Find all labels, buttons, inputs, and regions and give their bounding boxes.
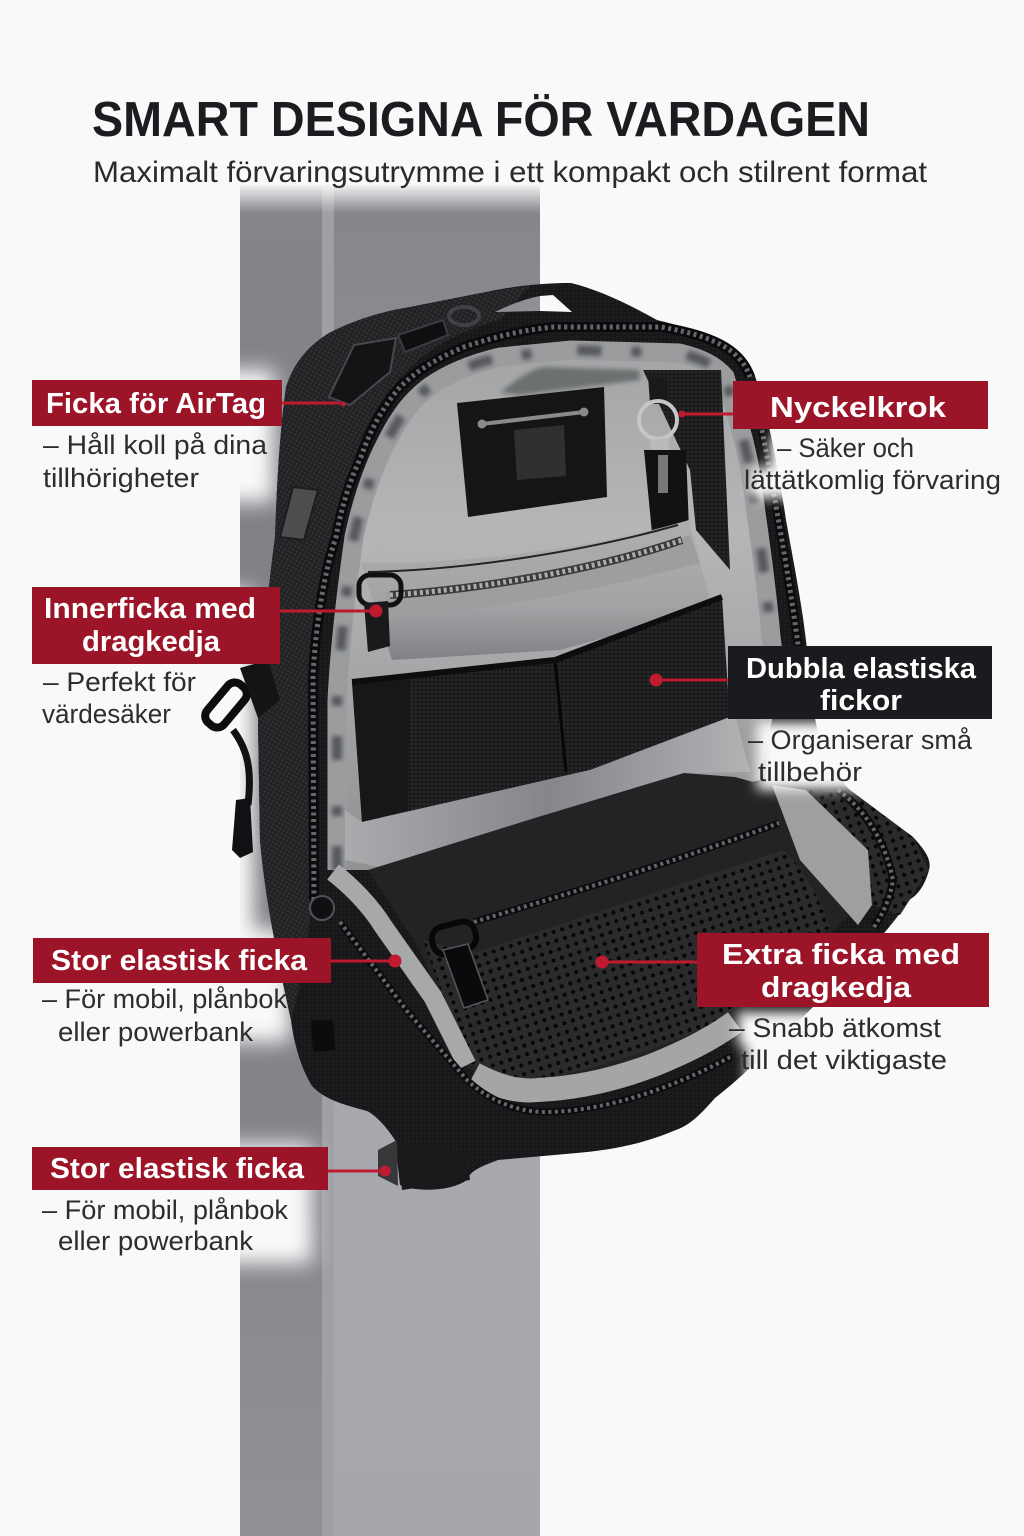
callout: Nyckelkrok <box>733 381 1001 495</box>
callout: Extra ficka med dragkedja: – Snabb ätkomst <box>729 1013 942 1043</box>
callout: Nyckelkrok: – Säker och <box>777 433 914 463</box>
connector lines and dots <box>280 402 734 1176</box>
flap outer zipper <box>340 922 732 1112</box>
callout: Stor elastisk ficka 1 <box>33 938 331 1047</box>
grey pillar <box>238 183 542 1536</box>
callout: Innerficka med dragkedja: Innerficka med <box>44 593 256 625</box>
callout: Dubbla elastiska fickor: tillbehör <box>758 757 862 787</box>
top zipper pulls <box>329 307 479 405</box>
flap zipper <box>474 823 779 922</box>
flap grey trim bottom <box>474 1022 735 1090</box>
white glow behind left labels <box>0 370 312 1263</box>
callout: Stor elastisk ficka 1: – För mobil, plånbok <box>42 984 287 1014</box>
callout: Extra ficka med dragkedja: till det viktigaste <box>741 1045 947 1075</box>
callout: Stor elastisk ficka 2: Stor elastisk ficka <box>50 1153 305 1185</box>
inner zipper pull <box>359 575 401 652</box>
bottom strap loop <box>378 1140 470 1190</box>
callout: Dubbla elastiska fickor <box>728 646 992 787</box>
flap grey trim right <box>772 785 872 925</box>
white glow over right side of bag <box>738 436 1024 1110</box>
flap zipper pull <box>429 919 488 1008</box>
lower flap <box>333 773 929 1112</box>
side strap tab <box>280 487 318 540</box>
callout: Dubbla elastiska fickor: – Organiserar små <box>748 725 973 755</box>
callout: Stor elastisk ficka 1: eller powerbank <box>58 1017 254 1047</box>
interior lining <box>337 350 778 870</box>
title: SMART DESIGNA FÖR VARDAGEN <box>92 93 870 147</box>
dual elastic pockets <box>352 597 730 822</box>
callout: Innerficka med dragkedja: dragkedja <box>82 626 221 658</box>
outer fabric panel <box>258 286 530 1020</box>
callout: Extra ficka med dragkedja: Extra ficka med <box>722 939 960 971</box>
flap dark edge right <box>806 790 929 915</box>
dark mesh behind key hook <box>643 370 730 570</box>
flap grey trim left <box>333 872 467 1065</box>
mesh pocket <box>423 850 830 1083</box>
inner zip pocket <box>361 520 725 660</box>
dark shadow above patch <box>500 367 640 395</box>
backpack illustration <box>202 283 930 1190</box>
callout: Stor elastisk ficka 2: eller powerbank <box>58 1226 254 1256</box>
bag body <box>258 283 930 1190</box>
callout: Ficka för AirTag <box>32 380 282 493</box>
callout: Nyckelkrok: lättätkomlig förvaring <box>744 465 1001 495</box>
patch <box>457 387 607 517</box>
subtitle: Maximalt förvaringsutrymme i ett kompakt och stilrent format <box>93 156 928 189</box>
callout: Innerficka med dragkedja: värdesäker <box>42 699 171 729</box>
key hook <box>639 375 689 533</box>
flap outer zipper right <box>838 790 893 927</box>
main zipper <box>313 327 750 900</box>
callout: Extra ficka med dragkedja <box>697 933 989 1075</box>
callout: Stor elastisk ficka 2 <box>32 1147 328 1256</box>
side zipper pull <box>202 660 280 858</box>
callout: Stor elastisk ficka 2: – För mobil, plånbok <box>42 1195 288 1225</box>
grey floor strip <box>345 715 750 867</box>
callout: Ficka för AirTag: – Håll koll på dina <box>43 430 268 460</box>
callout: Ficka för AirTag: tillhörigheter <box>43 463 199 493</box>
right zipper <box>762 430 800 660</box>
callout: Stor elastisk ficka 1: Stor elastisk ficka <box>51 945 308 977</box>
callout: Dubbla elastiska fickor: Dubbla elastiska <box>746 653 977 685</box>
callout: Ficka för AirTag: Ficka för AirTag <box>46 388 266 420</box>
callout: Innerficka med dragkedja <box>32 587 280 729</box>
callout: Innerficka med dragkedja: – Perfekt för <box>43 667 196 697</box>
callout: Nyckelkrok: Nyckelkrok <box>770 392 947 424</box>
callout: Dubbla elastiska fickor: fickor <box>820 685 902 717</box>
handle gap <box>495 295 572 312</box>
left lower zipper pull <box>310 896 335 1052</box>
grey binding <box>337 350 778 870</box>
callout: Extra ficka med dragkedja: dragkedja <box>761 972 912 1004</box>
